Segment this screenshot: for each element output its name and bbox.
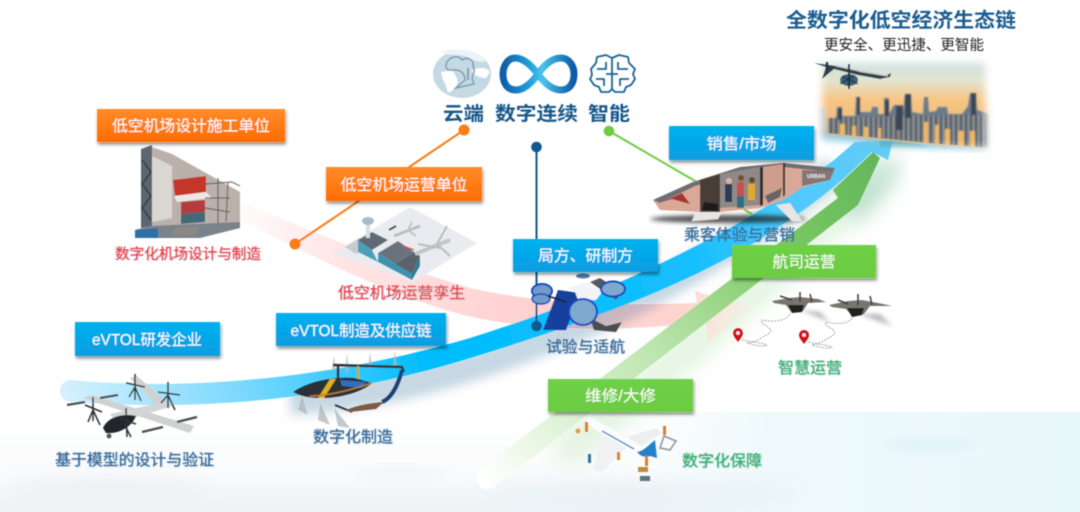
label: cloud: 云端 <box>443 103 484 125</box>
label box <box>513 239 658 272</box>
label box <box>97 109 285 142</box>
city skyline photo <box>816 59 992 153</box>
label box: 低空机场运营单位 <box>340 176 468 194</box>
label box <box>669 126 814 160</box>
label box <box>276 313 446 346</box>
label: digital thread: 数字连续 <box>495 102 578 125</box>
icon: passenger cabin vehicle <box>650 163 835 223</box>
panel: certification <box>513 239 658 356</box>
red digital thread arrow <box>225 196 752 343</box>
label box: 维修/大修 <box>585 387 657 405</box>
icon: airliner with technicians <box>576 417 676 481</box>
caption: 基于模型的设计与验证 <box>55 451 214 469</box>
subtitle: 更安全、更迅捷、更智能 <box>824 36 984 54</box>
caption: 数字化机场设计与制造 <box>115 246 262 263</box>
icon: passenger cabin vehicle: URBAN <box>807 174 825 180</box>
label box <box>75 322 220 356</box>
icon: map pin left <box>733 328 743 342</box>
label box <box>548 379 693 412</box>
panel: sales and market <box>650 126 835 244</box>
icon: map pin right <box>799 330 809 344</box>
caption: 乘客体验与营销 <box>684 226 795 244</box>
label box <box>732 245 876 278</box>
heading block <box>786 8 1016 54</box>
icon: eVTOL aircraft <box>67 374 197 438</box>
label box: 局方、研制方 <box>538 247 633 265</box>
panel: airline operations <box>732 245 892 377</box>
caption: 智慧运营 <box>778 359 842 377</box>
label box <box>326 167 482 201</box>
label box: 低空机场设计施工单位 <box>112 117 270 135</box>
panel: airport operations <box>326 167 482 302</box>
blue digital thread arrow <box>60 140 893 405</box>
icon: two drones with routes <box>741 292 892 348</box>
icon: blue ducted-fan aircraft <box>532 274 625 332</box>
orange connector line <box>290 124 470 250</box>
label box: eVTOL制造及供应链 <box>290 321 432 340</box>
label: intelligence: 智能 <box>588 103 630 125</box>
green digital thread arrow <box>476 152 880 489</box>
label box: eVTOL研发企业 <box>92 331 202 349</box>
panel: maintenance <box>548 379 762 481</box>
title: 全数字化低空经济生态链 <box>786 8 1016 32</box>
green connector line <box>604 126 752 214</box>
panel: digital technologies <box>433 49 635 125</box>
icon: drone over city <box>814 62 891 89</box>
icon: brain <box>590 55 635 92</box>
caption: 试验与适航 <box>546 338 625 356</box>
icon: infinity loop <box>503 58 574 90</box>
green arrow glow <box>560 160 895 455</box>
caption: 数字化保障 <box>682 452 762 470</box>
caption: 低空机场运营孪生 <box>338 284 465 302</box>
panel: airport design <box>97 109 285 263</box>
label box: 销售/市场 <box>706 135 776 153</box>
caption: 数字化制造 <box>313 428 394 446</box>
label box: 航司运营 <box>772 253 836 271</box>
icon: airport building <box>135 145 240 238</box>
panel: eVTOL R&D <box>55 322 220 469</box>
navy connector line <box>531 142 542 331</box>
panel: eVTOL manufacturing <box>276 313 446 446</box>
icon: cloud globe <box>433 49 491 98</box>
icon: tandem-wing eVTOL <box>293 350 404 428</box>
icon: isometric airport <box>333 207 477 282</box>
